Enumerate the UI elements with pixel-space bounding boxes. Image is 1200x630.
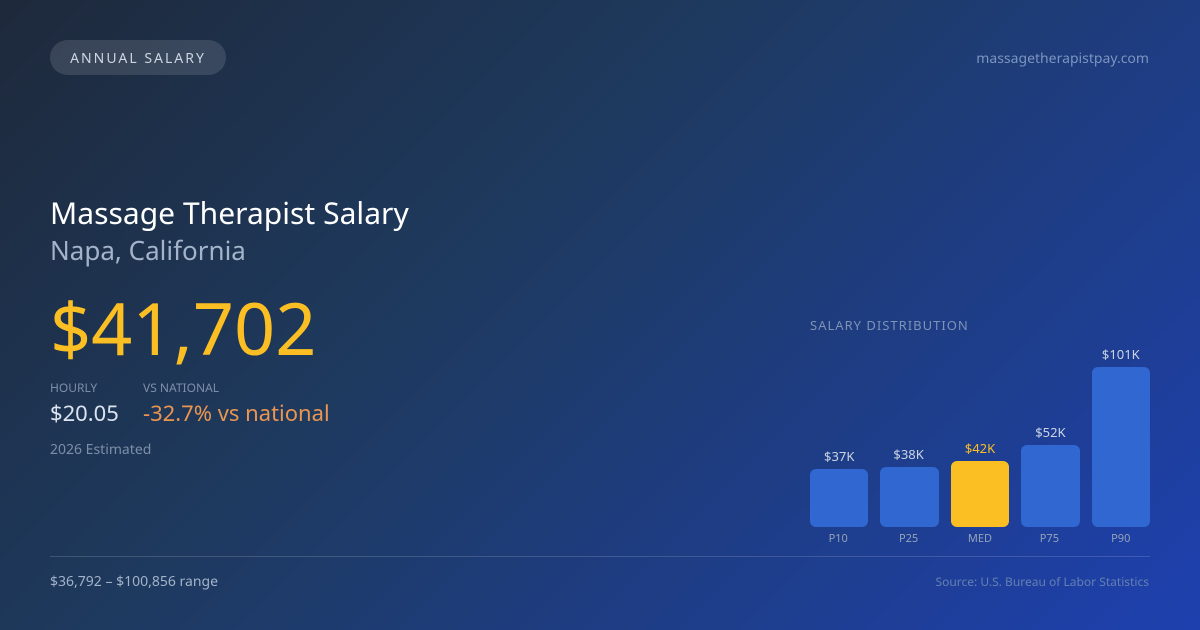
value median: $42K [965, 439, 995, 457]
label P10: P10 [829, 531, 848, 546]
value P25: $38K [893, 445, 924, 463]
badge: annual salary [50, 40, 226, 75]
bar P75 [1021, 445, 1080, 527]
title: Massage Therapist Salary [50, 192, 409, 233]
label median: MED [968, 531, 992, 546]
value P10: $37K [824, 447, 854, 465]
stat: hourly [50, 379, 119, 428]
bar P90 [1092, 367, 1150, 527]
label P25: P25 [899, 531, 918, 546]
vs national value: -32.7% vs national [143, 398, 330, 428]
hourly value: $20.05 [50, 398, 119, 428]
chart heading: SALARY DISTRIBUTION [810, 316, 969, 334]
value P75: $52K [1035, 423, 1066, 441]
bar median [951, 461, 1009, 527]
subtitle: location: Napa, California [50, 232, 246, 268]
badge: annual salary: ANNUAL SALARY [70, 49, 206, 68]
main salary figure: $41,702 [50, 279, 316, 377]
estimate note: 2026 Estimated [50, 440, 151, 459]
stat: vs national [143, 379, 330, 428]
label P90: P90 [1111, 531, 1130, 546]
site name: massagetherapistpay.com [976, 49, 1149, 68]
vs national label: VS NATIONAL [143, 379, 219, 396]
bar P25 [880, 467, 939, 527]
bar P10 [810, 469, 868, 527]
hourly label: HOURLY [50, 379, 97, 396]
source: Source: U.S. Bureau of Labor Statistics [936, 573, 1149, 590]
value P90: $101K [1102, 345, 1140, 363]
salary range: $36,792 – $100,856 range [50, 572, 218, 591]
label P75: P75 [1040, 531, 1059, 546]
